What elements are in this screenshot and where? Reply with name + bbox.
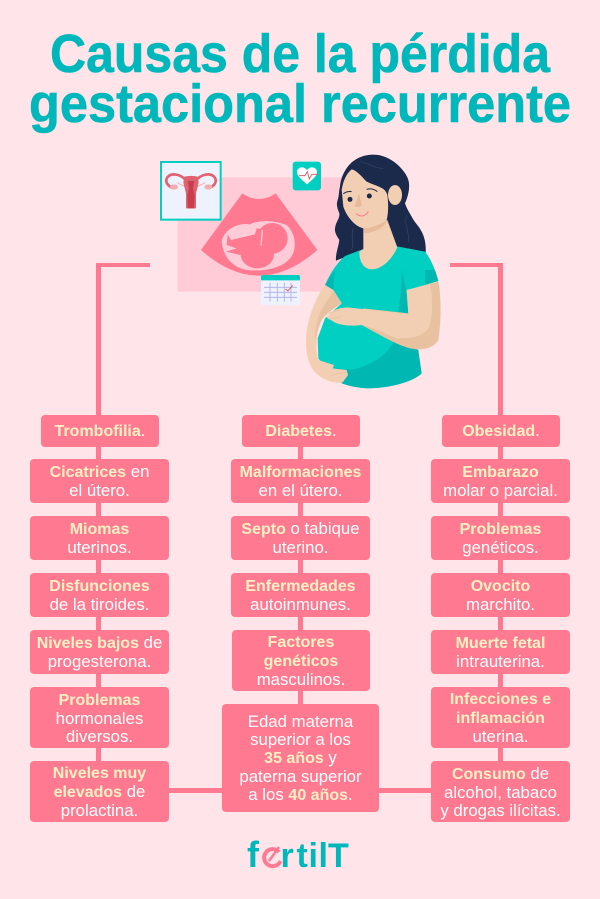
box: Consumo: alcohol, tabaco [444,782,557,802]
woman: neck shadow [363,221,387,233]
box: Problemas hormonales: diversos. [66,726,133,746]
box: Septo: uterino. [272,538,328,557]
box: Obesidad [442,415,560,447]
box: Muerte fetal: intrauterina. [456,652,545,671]
box: Consumo: y drogas ilícitas. [440,800,561,820]
connector: centre column [298,440,303,710]
illustration: pregnant woman with ultrasound [160,154,441,388]
woman: hair strands [352,162,409,250]
box: Edad: 35 años y [264,748,337,766]
box: Muerte fetal [431,630,570,674]
box: Miomas: uterinos. [67,538,132,557]
box: Ovocito [431,573,570,617]
box: Disfunciones: de la tiroides. [50,595,149,614]
box: Miomas [30,516,169,560]
icon: calendar [261,275,300,305]
box: Trombofilia [41,415,159,447]
box: Factores genéticos: genéticos [264,653,338,670]
title: gestacional recurrente [29,75,571,134]
box: Niveles muy elevados: elevados de [54,782,145,801]
ultrasound backdrop [178,177,344,292]
box: Embarazo: molar o parcial. [443,481,558,500]
woman: neck [359,220,397,269]
connector: left column [96,263,150,761]
box: Problemas hormonales [30,687,169,748]
box: Problemas hormonales: hormonales [56,708,143,728]
box: Cicatrices: el útero. [69,481,130,500]
box: Consumo [431,761,570,822]
box: Factores genéticos [232,630,370,691]
box: Embarazo [431,459,570,503]
woman: forearm light [327,284,432,338]
woman: shirt side shade [325,270,438,313]
box: Septo [231,516,370,560]
logo: fertilT: rtilT [280,837,349,875]
box: Ovocito: Ovocito [471,578,530,595]
box: Disfunciones [30,573,169,617]
woman: fingers [328,310,347,376]
woman: hair [335,155,426,261]
box: Obesidad: Obesidad. [462,421,540,440]
box: Enfermedades: Enfermedades [245,578,356,595]
box: Edad [222,704,379,812]
box: Enfermedades [231,573,370,617]
box: Niveles muy elevados: Niveles muy [53,765,146,782]
title [29,25,571,134]
box: Diabetes: Diabetes. [265,421,337,440]
logo: fertilT: f [247,834,260,875]
box: Infecciones: inflamación [456,710,545,727]
box: Niveles bajos: Niveles bajos de [37,633,162,652]
connector: bottom right [379,788,431,793]
box: Edad: superior a los [250,730,351,748]
box: Edad: paterna superior [239,766,362,786]
column: left [30,415,169,822]
woman: left arm shade [315,290,342,342]
box: Malformaciones: Malformaciones [240,464,361,481]
connector: right column [450,263,503,761]
box: Infecciones: Infecciones e [450,691,551,708]
connector: bottom left [169,788,222,793]
woman: left arm [306,285,348,383]
logo: fertilT [247,834,349,875]
icon: heart monitor [293,162,321,190]
box: Edad: a los 40 años. [248,784,353,804]
box: Diabetes [242,415,360,447]
box: Niveles bajos: progesterona. [48,652,151,671]
box: Malformaciones [231,459,370,503]
box: Factores genéticos: Factores [268,634,334,651]
icon: uterus [161,162,221,220]
title: Causas de la pérdida [50,25,551,84]
box: Malformaciones: en el útero. [259,481,342,500]
box: Enfermedades: autoinmunes. [250,595,351,614]
woman: right arm [362,282,441,349]
box: Embarazo: Embarazo [462,464,539,481]
box: Cicatrices [30,459,169,503]
box: Problemas genéticos: Problemas [460,521,541,538]
box: Septo: Septo o tabique [241,519,360,538]
box: Niveles muy elevados: prolactina. [61,801,138,820]
box: Trombofilia: Trombofilia. [55,421,145,440]
icon: ultrasound scan [201,193,317,276]
woman: face [342,169,388,228]
box: Infecciones: uterina. [472,727,528,746]
box: Problemas genéticos: genéticos. [462,538,539,557]
column: centre [222,415,379,812]
box: Consumo: Consumo de [452,764,549,782]
box: Cicatrices: Cicatrices en [50,462,149,481]
box: Problemas hormonales: Problemas [59,692,140,708]
box: Muerte fetal: Muerte fetal [456,635,545,652]
woman: shirt shade [335,342,422,388]
woman: ear [388,185,402,205]
column: right [431,415,570,822]
box: Miomas: Miomas [70,521,129,538]
box: Disfunciones: Disfunciones [49,578,150,595]
box: Infecciones [431,687,570,748]
box: Edad: Edad materna [248,712,353,730]
box: Ovocito: marchito. [466,595,535,614]
woman: facial features [343,189,377,216]
woman: shirt [318,247,438,388]
box: Factores genéticos: masculinos. [257,670,345,689]
box: Niveles bajos [30,630,169,674]
box: Problemas genéticos [431,516,570,560]
box: Niveles muy elevados [30,761,169,822]
